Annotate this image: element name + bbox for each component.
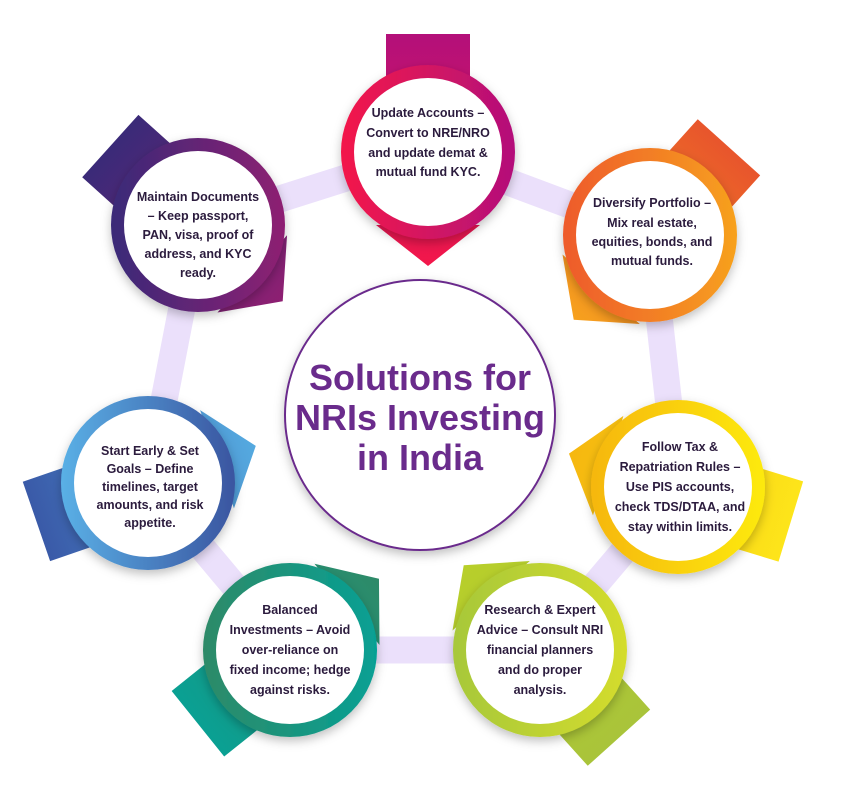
node 5: balanced xyxy=(165,538,411,764)
node 2: diversify xyxy=(535,113,768,355)
node 7: maintain documents: Maintain Documents xyxy=(137,190,259,204)
node 4: research: and do proper xyxy=(498,663,582,677)
node 2: diversify: Diversify Portfolio – xyxy=(593,196,711,210)
node 3: tax: Use PIS accounts, xyxy=(626,480,734,494)
node 6: start early: appetite. xyxy=(124,516,176,530)
node 1: update accounts: mutual fund KYC. xyxy=(376,165,480,179)
arrow 4 xyxy=(425,530,658,772)
node 5: balanced: Balanced xyxy=(262,603,318,617)
node 4: research: analysis. xyxy=(514,683,566,697)
node 2: diversify: Mix real estate, xyxy=(607,216,697,230)
node 1: update accounts xyxy=(341,34,515,266)
node 7: maintain documents xyxy=(76,107,318,340)
node 6: start early xyxy=(19,396,273,571)
node 4: research xyxy=(425,530,658,772)
title: NRIs Investing xyxy=(295,397,545,438)
node 5: balanced: against risks. xyxy=(250,683,330,697)
node 3: tax: stay within limits. xyxy=(628,520,732,534)
node 3: tax: Follow Tax & xyxy=(642,440,718,454)
connector ring xyxy=(148,152,678,650)
node 4: research: financial planners xyxy=(487,643,593,657)
arrow 5 xyxy=(165,538,411,764)
title: in India xyxy=(357,437,484,478)
node 6: start early: Start Early & Set xyxy=(101,444,200,458)
node 3: tax: Repatriation Rules – xyxy=(620,460,740,474)
node 3: tax: check TDS/DTAA, and xyxy=(615,500,745,514)
node 7: maintain documents: PAN, visa, proof of xyxy=(143,228,254,242)
center circle xyxy=(285,280,555,550)
arrow 2 xyxy=(535,113,768,355)
node 1: update accounts: Convert to NRE/NRO xyxy=(366,126,490,140)
arrow 1 xyxy=(376,34,480,266)
arrow 3 xyxy=(554,404,806,571)
title: Solutions for xyxy=(309,357,531,398)
node 5: balanced: Investments – Avoid xyxy=(230,623,350,637)
node 2: diversify: equities, bonds, and xyxy=(592,235,712,249)
node 6: start early: amounts, and risk xyxy=(97,498,204,512)
arrow 6 xyxy=(19,397,273,571)
node 1: update accounts: and update demat & xyxy=(368,146,488,160)
title xyxy=(295,357,545,478)
node 3: tax xyxy=(554,400,806,574)
node 5: balanced: over-reliance on xyxy=(242,643,338,657)
node 4: research: Research & Expert xyxy=(484,603,596,617)
node 6: start early: Goals – Define xyxy=(107,462,193,476)
node 7: maintain documents: – Keep passport, xyxy=(148,209,248,223)
node 4: research: Advice – Consult NRI xyxy=(477,623,603,637)
node 2: diversify: mutual funds. xyxy=(611,254,693,268)
arrow 7 xyxy=(76,107,318,340)
node 7: maintain documents: ready. xyxy=(180,266,216,280)
node 1: update accounts: Update Accounts – xyxy=(372,106,484,120)
node 6: start early: timelines, target xyxy=(102,480,199,494)
node 5: balanced: fixed income; hedge xyxy=(230,663,350,677)
node 7: maintain documents: address, and KYC xyxy=(145,247,251,261)
